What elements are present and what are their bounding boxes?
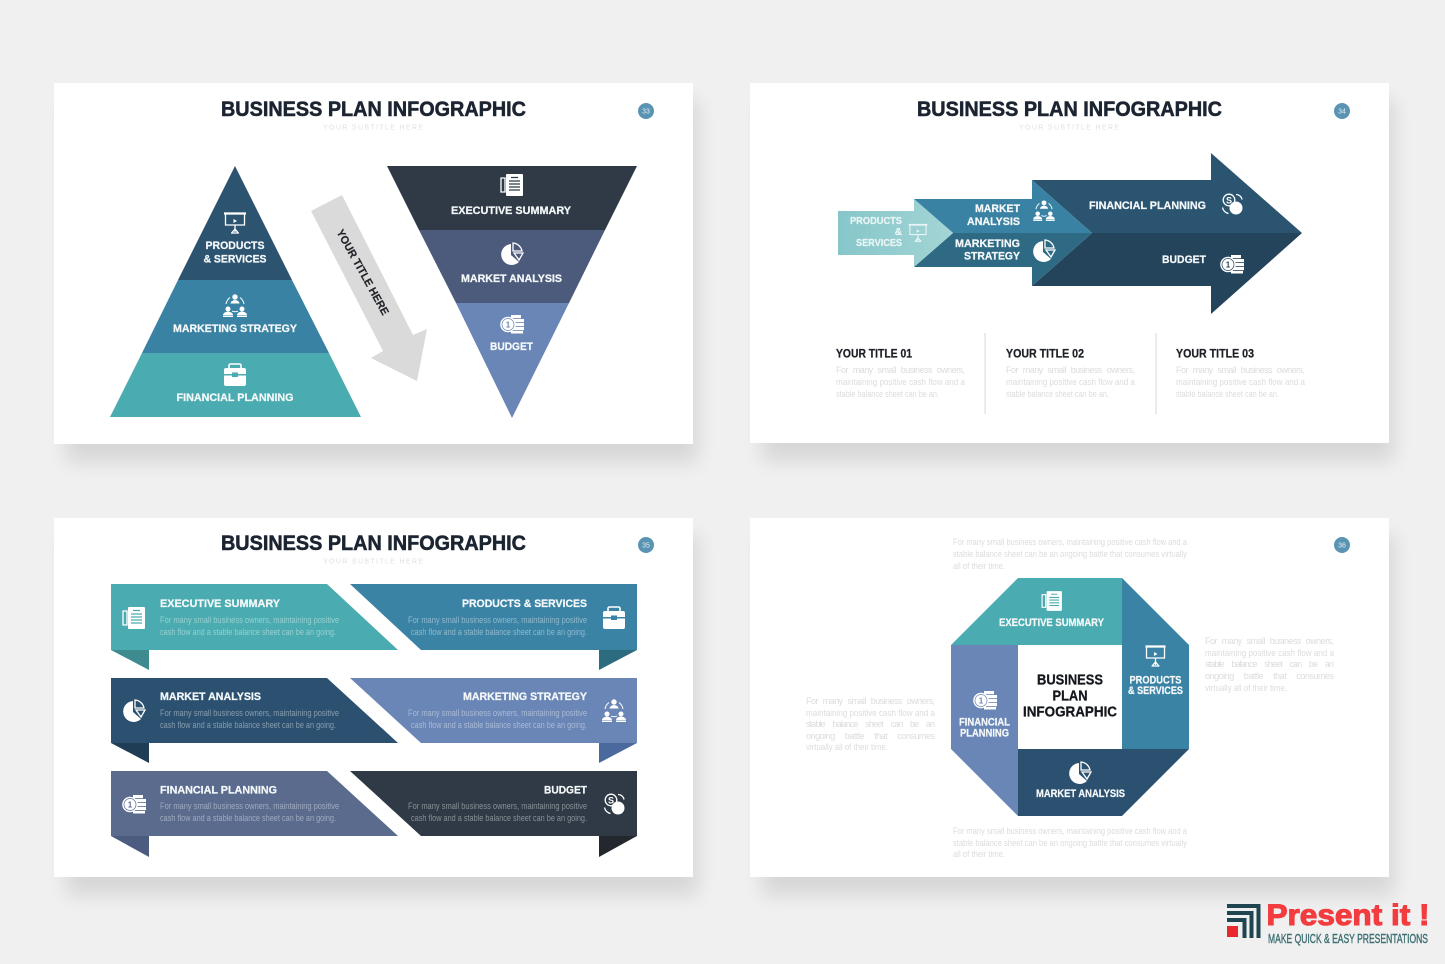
page number badge: 33 xyxy=(642,108,650,116)
text block: top: stable balance sheet can be an ongoing battle that consumes virtually xyxy=(953,549,1187,559)
label: products and services: & SERVICES xyxy=(1128,685,1183,697)
page number badge xyxy=(1334,537,1350,553)
ribbon: financial planning: cash flow and a stable balance sheet can be an going. xyxy=(160,813,336,823)
center title xyxy=(1023,672,1117,720)
text block: your title 01: YOUR TITLE 01 xyxy=(836,348,913,360)
text block: your title 02: YOUR TITLE 02 xyxy=(1006,348,1084,360)
label: products and services xyxy=(204,240,266,266)
title: BUSINESS PLAN INFOGRAPHIC xyxy=(221,97,526,121)
logo: present it: Present it ! xyxy=(1266,899,1430,932)
text block: left: For many small business owners, xyxy=(806,696,935,706)
icon: pie chart xyxy=(123,700,145,722)
text block: left: ongoing battle that consumes xyxy=(806,731,936,741)
subtitle: YOUR SUBTITLE HERE xyxy=(1019,124,1119,132)
title: BUSINESS PLAN INFOGRAPHIC xyxy=(917,97,1222,121)
icon: coins: 1 xyxy=(1226,260,1231,270)
label: products and services xyxy=(1128,674,1183,697)
text block: your title 03: YOUR TITLE 03 xyxy=(1176,348,1254,360)
text block: top: For many small business owners, maintaining positive cash flow and a xyxy=(953,537,1187,547)
text block: your title 03: maintaining positive cash flow and a xyxy=(1176,377,1305,387)
label: financial planning: FINANCIAL PLANNING xyxy=(1089,200,1206,212)
icon: briefcase xyxy=(603,607,625,629)
text block: right: maintaining positive cash flow and a xyxy=(1205,648,1334,658)
inverted pyramid chart xyxy=(387,166,637,418)
panel: pyramid slide xyxy=(54,83,693,444)
label: market analysis: MARKET xyxy=(975,203,1020,215)
ribbon: marketing strategy: For many small business owners, maintaining positive xyxy=(408,708,587,718)
center title: BUSINESS xyxy=(1037,672,1103,688)
text block: your title 03 xyxy=(1176,348,1305,399)
page number badge xyxy=(1334,103,1350,119)
ribbon: budget: BUDGET xyxy=(544,784,587,796)
text block: your title 02: For many small business owners, xyxy=(1006,365,1135,375)
icon: dollar exchange: S xyxy=(1226,196,1232,206)
label: marketing strategy xyxy=(955,238,1021,262)
arrow: your title here xyxy=(311,195,427,381)
label: executive summary: EXECUTIVE SUMMARY xyxy=(999,617,1105,629)
icon: coins: 1 xyxy=(979,696,984,706)
label: market analysis: MARKET ANALYSIS xyxy=(1036,788,1125,800)
ribbon: products and services: cash flow and a stable balance sheet can be an going. xyxy=(411,627,587,637)
icon: dollar exchange: S xyxy=(608,796,614,806)
page number badge: 35 xyxy=(642,542,650,550)
label: products and services xyxy=(850,216,902,249)
center title: INFOGRAPHIC xyxy=(1023,704,1117,720)
icon: pie chart xyxy=(1069,762,1091,784)
ribbon: budget: For many small business owners, maintaining positive xyxy=(408,801,587,811)
ribbon: products and services xyxy=(350,584,637,670)
ribbon: budget xyxy=(350,771,637,857)
stepped arrow chart xyxy=(838,153,1302,314)
pyramid chart xyxy=(110,166,361,417)
icon: pie chart xyxy=(1033,240,1055,262)
page number badge xyxy=(638,537,654,553)
label: products and services: & xyxy=(895,227,902,238)
label: market analysis xyxy=(967,203,1020,228)
text block: your title 01 xyxy=(836,348,965,399)
ribbon: market analysis: For many small business owners, maintaining positive xyxy=(160,708,339,718)
center title: PLAN xyxy=(1052,688,1088,704)
icon: logo mark xyxy=(1227,906,1258,938)
text block: right: virtually all of their time. xyxy=(1205,683,1287,693)
page number badge: 36 xyxy=(1338,542,1346,550)
label: products and services: PRODUCTS xyxy=(206,240,264,252)
text block: your title 01: maintaining positive cash flow and a xyxy=(836,377,965,387)
icon: coins xyxy=(500,315,524,334)
label: financial planning: FINANCIAL xyxy=(959,716,1010,728)
label: executive summary: EXECUTIVE SUMMARY xyxy=(451,205,572,217)
ribbon: executive summary: For many small business owners, maintaining positive xyxy=(160,615,339,625)
icon: document xyxy=(1042,591,1062,611)
icon: document xyxy=(123,607,145,629)
ribbon: executive summary xyxy=(111,584,398,670)
icon: coins xyxy=(122,795,146,814)
ribbon: products and services: PRODUCTS & SERVICES xyxy=(462,598,587,610)
panel: ribbon slide xyxy=(54,518,693,877)
title: BUSINESS PLAN INFOGRAPHIC xyxy=(221,531,526,555)
icon: people xyxy=(223,294,247,317)
icon: presentation board xyxy=(909,225,927,241)
icon: pie chart xyxy=(501,243,523,265)
ribbon: financial planning: For many small business owners, maintaining positive xyxy=(160,801,339,811)
ribbon: executive summary: EXECUTIVE SUMMARY xyxy=(160,598,281,610)
text block: bottom xyxy=(953,826,1187,859)
ribbon: products and services: For many small business owners, maintaining positive xyxy=(408,615,587,625)
subtitle: YOUR SUBTITLE HERE xyxy=(323,558,423,566)
ribbon: budget: cash flow and a stable balance sheet can be an going. xyxy=(411,813,587,823)
ribbon: marketing strategy: cash flow and a stable balance sheet can be an going. xyxy=(411,720,587,730)
text block: left: maintaining positive cash flow and a xyxy=(806,708,935,718)
text block: bottom: all of their time. xyxy=(953,849,1005,859)
text block: right: For many small business owners, xyxy=(1205,636,1334,646)
text block: your title 01: For many small business owners, xyxy=(836,365,965,375)
label: financial planning: FINANCIAL PLANNING xyxy=(176,392,294,404)
ribbon: market analysis: cash flow and a stable balance sheet can be an going. xyxy=(160,720,336,730)
label: budget: BUDGET xyxy=(490,341,533,353)
text block: left xyxy=(806,696,936,752)
ribbon: market analysis: MARKET ANALYSIS xyxy=(160,691,261,703)
text block: your title 02: stable balance sheet can be an. xyxy=(1006,389,1109,399)
label: marketing strategy: STRATEGY xyxy=(964,250,1021,262)
ribbon: financial planning xyxy=(111,771,398,857)
icon: presentation board xyxy=(1146,646,1166,666)
label: marketing strategy: MARKETING xyxy=(955,238,1020,250)
ribbon: financial planning: FINANCIAL PLANNING xyxy=(160,784,277,796)
octagon chart xyxy=(951,578,1189,816)
label: financial planning xyxy=(959,716,1010,740)
icon: coins: 1 xyxy=(128,800,133,810)
text block: your title 03: For many small business owners, xyxy=(1176,365,1305,375)
text block: your title 02 xyxy=(1006,348,1135,399)
logo: present it xyxy=(1227,899,1430,946)
text block: your title 01: stable balance sheet can be an. xyxy=(836,389,939,399)
text block: right: stable balance sheet can be an xyxy=(1205,659,1334,669)
text block: left: stable balance sheet can be an xyxy=(806,719,935,729)
text block: right xyxy=(1205,636,1334,693)
label: budget: BUDGET xyxy=(1162,254,1206,266)
text block: your title 02: maintaining positive cash flow and a xyxy=(1006,377,1135,387)
icon: people xyxy=(602,699,626,722)
text block: left: virtually all of their time. xyxy=(806,742,888,752)
icon: people xyxy=(1033,200,1055,221)
label: market analysis: ANALYSIS xyxy=(967,216,1020,228)
ribbon: marketing strategy xyxy=(350,678,637,763)
icon: dollar exchange xyxy=(1222,194,1242,214)
subtitle: YOUR SUBTITLE HERE xyxy=(323,124,423,132)
label: financial planning: PLANNING xyxy=(960,728,1009,740)
ribbon: market analysis xyxy=(111,678,398,763)
text block: right: ongoing battle that consumes xyxy=(1205,671,1334,681)
text block: your title 03: stable balance sheet can be an. xyxy=(1176,389,1279,399)
label: products and services: PRODUCTS xyxy=(850,216,902,227)
icon: coins xyxy=(1220,255,1244,274)
icon: presentation board xyxy=(224,214,246,233)
text block: top: all of their time. xyxy=(953,561,1005,571)
arrow: your title here: YOUR TITLE HERE xyxy=(334,228,391,317)
panel: arrow slide xyxy=(750,83,1389,443)
page number badge xyxy=(638,103,654,119)
text block: bottom: For many small business owners, maintaining positive cash flow and a xyxy=(953,826,1187,836)
ribbon: marketing strategy: MARKETING STRATEGY xyxy=(463,691,588,703)
panel: octagon slide xyxy=(750,518,1389,877)
icon: coins: 1 xyxy=(506,320,511,330)
label: products and services: SERVICES xyxy=(856,238,902,249)
icon: briefcase xyxy=(224,364,246,386)
icon: dollar exchange xyxy=(604,794,624,814)
label: products and services: PRODUCTS xyxy=(1130,674,1182,686)
icon: coins xyxy=(973,691,997,710)
icon: document xyxy=(501,174,523,196)
text block: bottom: stable balance sheet can be an ongoing battle that consumes virtually xyxy=(953,838,1187,848)
page number badge: 34 xyxy=(1338,108,1346,116)
label: products and services: & SERVICES xyxy=(204,254,266,266)
ribbon: executive summary: cash flow and a stable balance sheet can be an going. xyxy=(160,627,336,637)
text block: top xyxy=(953,537,1187,571)
label: market analysis: MARKET ANALYSIS xyxy=(461,273,562,285)
label: marketing strategy: MARKETING STRATEGY xyxy=(173,323,298,335)
